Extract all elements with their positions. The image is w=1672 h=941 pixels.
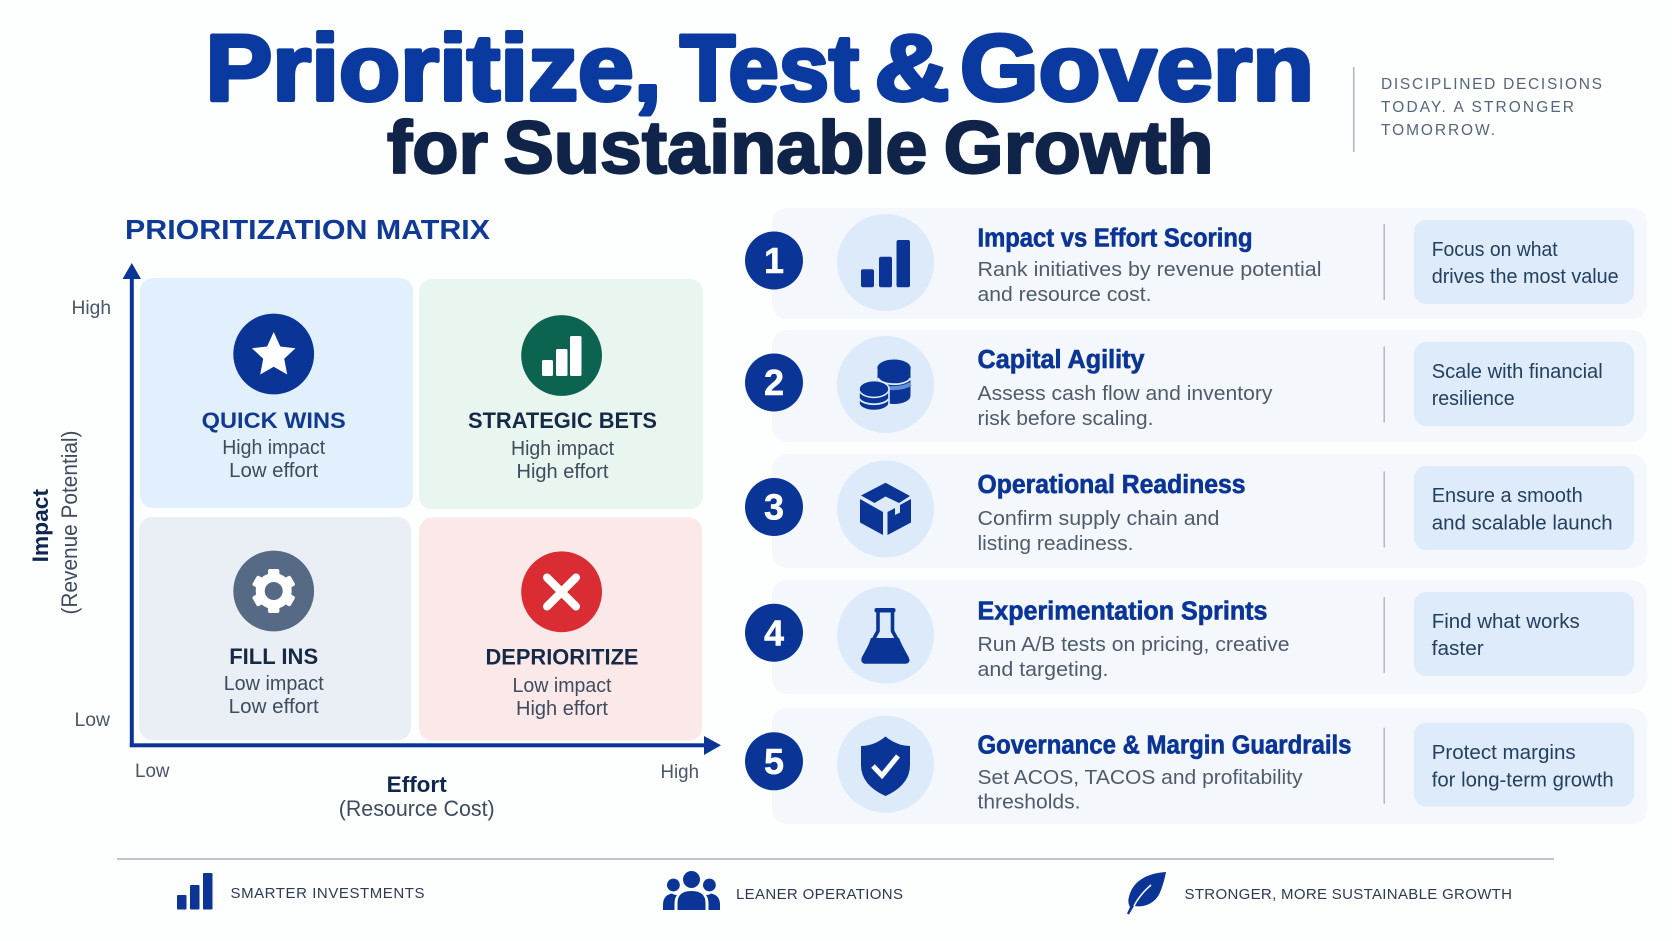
panel: step 1 impact vs effort scoring: Impact vs Effort Scoring — [978, 224, 1252, 252]
panel: step 3 operational readiness — [745, 454, 1647, 568]
axis tick labels: Low — [74, 710, 110, 731]
tagline — [1353, 67, 1602, 152]
number badge 1 — [745, 232, 803, 290]
panel: step 2 capital agility — [745, 330, 1647, 442]
axis tick labels: High — [660, 762, 699, 783]
quadrant: quick wins: High impact — [222, 437, 326, 459]
icon: people — [663, 871, 720, 910]
callout: Scale with financial — [1432, 360, 1603, 383]
description — [978, 766, 1303, 813]
quadrant: quick wins: Low effort — [229, 460, 319, 482]
description: listing readiness. — [978, 532, 1134, 555]
callout: Focus on what — [1432, 238, 1558, 261]
title: for — [387, 106, 488, 189]
callout — [1414, 342, 1634, 426]
number badge 1: 1 — [764, 240, 784, 281]
panel: step 3 operational readiness: Operational Readiness — [978, 471, 1246, 499]
description: Run A/B tests on pricing, creative — [978, 633, 1290, 656]
description — [978, 633, 1290, 681]
number badge 3 — [745, 478, 803, 536]
icon: cross — [521, 551, 602, 632]
icon: shield — [837, 716, 934, 813]
callout — [1414, 466, 1634, 550]
callout — [1414, 722, 1634, 806]
panel: step 2 capital agility: Capital Agility — [978, 346, 1145, 374]
axis tick labels: Low — [135, 761, 170, 782]
icon: leaf — [1127, 872, 1166, 914]
number badge 5 — [745, 732, 803, 790]
axis tick labels — [72, 298, 699, 783]
axis title: effort: (Resource Cost) — [339, 796, 495, 821]
icon: bar chart — [837, 214, 934, 311]
axis title: effort: Effort — [387, 772, 447, 797]
panel: step 4 experimentation sprints — [745, 580, 1647, 694]
panel: step 5 governance and margin guardrails: Governance & Margin Guardrails — [978, 731, 1352, 759]
callout — [1414, 592, 1634, 676]
title — [206, 15, 1314, 189]
axis title: impact: (Revenue Potential) — [57, 430, 82, 614]
footer item: leaner operations: LEANER OPERATIONS — [736, 886, 903, 903]
quadrant: strategic bets — [419, 279, 703, 509]
panel: step 4 experimentation sprints: Experimentation Sprints — [978, 597, 1268, 625]
icon: bars — [177, 873, 212, 910]
description: thresholds. — [978, 790, 1080, 813]
title: Sustainable — [503, 106, 927, 189]
footer item: stronger growth: STRONGER, MORE SUSTAINABLE GROWTH — [1184, 886, 1512, 903]
axis title: impact: Impact — [28, 488, 53, 562]
panel: step 1 impact vs effort scoring — [745, 208, 1647, 319]
heading: prioritization matrix: PRIORITIZATION MATRIX — [125, 214, 490, 245]
quadrant: deprioritize: Low impact — [512, 675, 612, 697]
quadrant: fill ins: FILL INS — [229, 644, 318, 669]
quadrant: deprioritize: DEPRIORITIZE — [486, 644, 638, 670]
description: Confirm supply chain and — [978, 507, 1220, 530]
quadrant: fill ins: Low impact — [224, 673, 324, 695]
quadrant: quick wins — [140, 278, 413, 508]
quadrant: fill ins: Low effort — [229, 696, 319, 718]
quadrant: strategic bets: High effort — [516, 461, 609, 483]
axis tick labels: High — [72, 298, 111, 319]
quadrant: quick wins: QUICK WINS — [202, 408, 346, 433]
title: & — [874, 15, 950, 120]
axis title: effort — [339, 772, 495, 821]
arrow: impact axis — [122, 263, 141, 747]
callout: drives the most value — [1432, 265, 1619, 288]
icon: coins — [837, 336, 934, 433]
title: Test — [680, 15, 859, 120]
callout: resilience — [1432, 387, 1515, 410]
description: Rank initiatives by revenue potential — [978, 258, 1322, 281]
quadrant: strategic bets: STRATEGIC BETS — [468, 408, 657, 433]
footer item: leaner operations — [663, 871, 903, 910]
description: Set ACOS, TACOS and profitability — [978, 766, 1303, 789]
title: Growth — [944, 106, 1214, 189]
number badge 2 — [745, 354, 803, 412]
icon: growth bars — [521, 315, 602, 396]
description — [978, 382, 1273, 430]
panel: step 5 governance and margin guardrails — [745, 708, 1647, 824]
quadrant: deprioritize — [419, 518, 702, 740]
tagline: DISCIPLINED DECISIONS — [1381, 76, 1602, 93]
quadrant: fill ins — [139, 517, 411, 740]
description — [978, 258, 1322, 306]
callout: Ensure a smooth — [1432, 484, 1583, 507]
number badge 3: 3 — [764, 486, 784, 528]
callout: for long-term growth — [1432, 769, 1614, 792]
quadrant: strategic bets: High impact — [511, 438, 614, 460]
title: Govern — [960, 15, 1314, 120]
callout: faster — [1432, 637, 1484, 660]
icon: gear — [233, 551, 314, 631]
footer item: smarter investments: SMARTER INVESTMENTS — [230, 885, 424, 902]
callout — [1414, 220, 1634, 304]
quadrant: deprioritize: High effort — [516, 698, 608, 720]
description: and resource cost. — [978, 283, 1152, 306]
axis title: impact — [28, 430, 82, 614]
description: risk before scaling. — [978, 407, 1154, 430]
callout: and scalable launch — [1432, 511, 1613, 534]
icon: star — [233, 314, 314, 394]
callout: Find what works — [1432, 610, 1580, 633]
number badge 4: 4 — [764, 612, 784, 654]
icon: box — [837, 460, 934, 558]
number badge 2: 2 — [764, 362, 784, 403]
tagline: TODAY. A STRONGER — [1381, 99, 1574, 116]
icon: flask — [837, 586, 934, 684]
number badge 4 — [745, 604, 803, 662]
panel: prioritization matrix chart — [28, 263, 721, 821]
description — [978, 507, 1220, 555]
description: Assess cash flow and inventory — [978, 382, 1273, 405]
footer item: stronger growth — [1127, 872, 1512, 914]
tagline: TOMORROW. — [1381, 122, 1495, 139]
number badge 5: 5 — [764, 741, 784, 782]
arrow: effort axis — [130, 736, 721, 755]
callout: Protect margins — [1432, 741, 1576, 764]
description: and targeting. — [978, 658, 1108, 681]
footer item: smarter investments — [177, 873, 424, 910]
title: Prioritize, — [206, 15, 662, 120]
